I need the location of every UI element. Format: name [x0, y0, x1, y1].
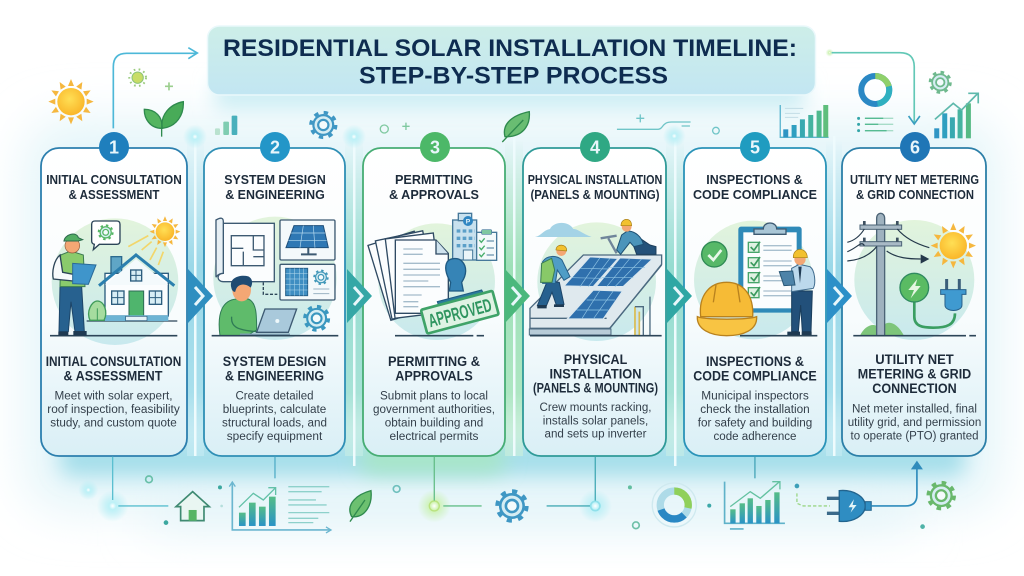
- arrow: title to step 6: [826, 49, 920, 124]
- arrow: step 1 to title: [113, 48, 197, 128]
- chart: donut bottom: [652, 483, 711, 527]
- lower heading: PHYSICAL: [564, 352, 627, 367]
- top heading: SYSTEM DESIGN: [224, 172, 326, 187]
- top heading: PHYSICAL INSTALLATION: [528, 172, 662, 187]
- description: [540, 402, 652, 440]
- lower heading: & ASSESSMENT: [64, 368, 163, 384]
- top heading: (PANELS & MOUNTING): [530, 187, 660, 202]
- icon: leaf: [350, 491, 371, 522]
- illustration: crew on roof: [529, 219, 662, 341]
- lower heading: UTILITY NET: [875, 352, 954, 367]
- description: roof inspection, feasibility: [47, 404, 180, 416]
- glow nodes: [183, 125, 686, 149]
- small dot: [920, 524, 925, 529]
- top heading: CODE COMPLIANCE: [693, 187, 817, 202]
- card outline: [204, 148, 345, 456]
- illustration: approved documents: APPROVED: [426, 294, 494, 331]
- panel: step 3 permitting: [363, 148, 505, 456]
- illustration: approved documents: [368, 213, 499, 340]
- title banner: [208, 26, 816, 95]
- top heading: [389, 172, 479, 202]
- top heading: & APPROVALS: [389, 187, 479, 202]
- description: check the installation: [700, 404, 810, 416]
- lower heading: [223, 354, 326, 384]
- panel: step 5 inspections: [684, 148, 826, 456]
- description: installs solar panels,: [543, 416, 648, 428]
- description: Meet with solar expert,: [54, 390, 172, 402]
- lower heading: (PANELS & MOUNTING): [533, 380, 658, 396]
- lower heading: INITIAL CONSULTATION: [46, 354, 181, 369]
- icon: house: [176, 492, 209, 521]
- icon: centre gear: [497, 491, 527, 521]
- description: electrical permits: [390, 431, 479, 443]
- description: for safety and building: [698, 418, 812, 430]
- top heading: INITIAL CONSULTATION: [46, 172, 182, 187]
- connector pipes between cards: [187, 136, 842, 466]
- step number badges: 4: [590, 138, 600, 158]
- bottom decorations: [78, 457, 954, 533]
- title text: STEP-BY-STEP PROCESS: [359, 62, 668, 90]
- top heading: & ASSESSMENT: [68, 187, 160, 202]
- lower heading: [388, 354, 480, 384]
- icon: green gear bottom: [928, 483, 954, 509]
- chart: rising bars: [725, 482, 785, 529]
- icon: small bars: [215, 116, 237, 135]
- chart: bars top: [780, 105, 829, 137]
- top heading: [224, 172, 326, 202]
- connector: step 5: [753, 457, 757, 478]
- step number badges: 3: [430, 138, 440, 158]
- lower heading: [858, 352, 971, 396]
- illustration: engineer with blueprints: [212, 217, 338, 340]
- description: [373, 390, 495, 443]
- illustration: inspector and house: [50, 216, 180, 345]
- connector: step 2: [273, 457, 277, 478]
- description: [698, 390, 812, 443]
- lower heading: CODE COMPLIANCE: [693, 368, 817, 384]
- illustration: utility pole and plug: [847, 213, 976, 340]
- connector: step 4: [547, 457, 639, 529]
- step number badges: 2: [270, 138, 280, 158]
- icon: green gear: [930, 72, 950, 93]
- lower heading: PERMITTING &: [388, 354, 480, 369]
- description: code adherence: [714, 431, 796, 443]
- description: government authorities,: [373, 404, 495, 416]
- lower heading: [46, 354, 181, 384]
- card outline: [363, 148, 505, 456]
- icon: gear: [311, 113, 336, 137]
- lower heading: INSPECTIONS &: [706, 354, 804, 369]
- description: structural loads, and: [222, 418, 327, 430]
- lower heading: METERING & GRID: [858, 366, 971, 382]
- description: Submit plans to local: [380, 390, 488, 402]
- lower heading: APPROVALS: [395, 368, 473, 384]
- lower heading: SYSTEM DESIGN: [223, 354, 326, 369]
- arrow chevrons between cards: [188, 269, 852, 323]
- description: specify equipment: [227, 431, 323, 443]
- step number badges: 5: [750, 138, 760, 158]
- description: study, and custom quote: [50, 418, 177, 430]
- top heading: INSPECTIONS &: [706, 172, 803, 187]
- top heading: UTILITY NET METERING: [850, 172, 979, 187]
- description: to operate (PTO) granted: [850, 430, 978, 442]
- card outline: [41, 148, 187, 456]
- description: obtain building and: [385, 418, 483, 430]
- small ring and plus: [380, 123, 410, 133]
- panel: step 2 system design: [204, 148, 345, 456]
- description: and sets up inverter: [544, 428, 647, 440]
- title text: RESIDENTIAL SOLAR INSTALLATION TIMELINE:: [223, 35, 797, 62]
- card outline: [842, 148, 986, 456]
- connector: step 3: [393, 457, 482, 523]
- card outline: [684, 148, 826, 456]
- connector: step 1: [78, 457, 223, 525]
- lower heading: [533, 352, 658, 396]
- description: Create detailed: [236, 390, 314, 402]
- icon: sprout: [144, 102, 183, 137]
- chart: donut top: [861, 76, 889, 104]
- top heading: [850, 172, 979, 202]
- decorative connector: [617, 114, 719, 134]
- step number badges: 6: [910, 138, 920, 158]
- top heading: [693, 172, 817, 202]
- illustration: inspector with checklist: [694, 221, 817, 339]
- panel: step 4 physical installation: [523, 148, 666, 456]
- illustration: approved documents: P: [466, 218, 471, 225]
- description: [47, 390, 180, 430]
- lower heading: CONNECTION: [872, 381, 957, 396]
- icon: sun: [48, 79, 94, 124]
- top heading: [46, 172, 182, 202]
- description: utility grid, and permission: [848, 417, 981, 429]
- description: [222, 390, 327, 443]
- top decorations: [48, 48, 978, 149]
- panel: step 1 initial consultation: [41, 148, 187, 456]
- top heading: & GRID CONNECTION: [856, 187, 974, 202]
- lower heading: INSTALLATION: [550, 366, 642, 382]
- top heading: & ENGINEERING: [225, 187, 325, 202]
- chart: bars with list: [229, 482, 331, 533]
- description: Net meter installed, final: [852, 404, 977, 416]
- step number badges: 1: [109, 138, 119, 158]
- top heading: PERMITTING: [395, 172, 473, 187]
- description: [848, 404, 981, 442]
- panel: step 6 utility connection: [842, 148, 986, 456]
- icon: small green sun: [129, 69, 173, 90]
- description: Municipal inspectors: [701, 390, 809, 402]
- description: Crew mounts racking,: [540, 402, 652, 414]
- chart: trend with arrow: [934, 93, 978, 138]
- icon: leaf: [502, 112, 529, 142]
- top heading: [528, 172, 662, 202]
- lower heading: [693, 354, 817, 384]
- description: blueprints, calculate: [223, 404, 326, 416]
- legend lines: [859, 118, 893, 131]
- lower heading: & ENGINEERING: [225, 368, 324, 384]
- card outline: [523, 148, 666, 456]
- icon: plug with arrow to step 6: [795, 461, 923, 521]
- step number badges: [99, 132, 930, 162]
- title text: [223, 35, 797, 90]
